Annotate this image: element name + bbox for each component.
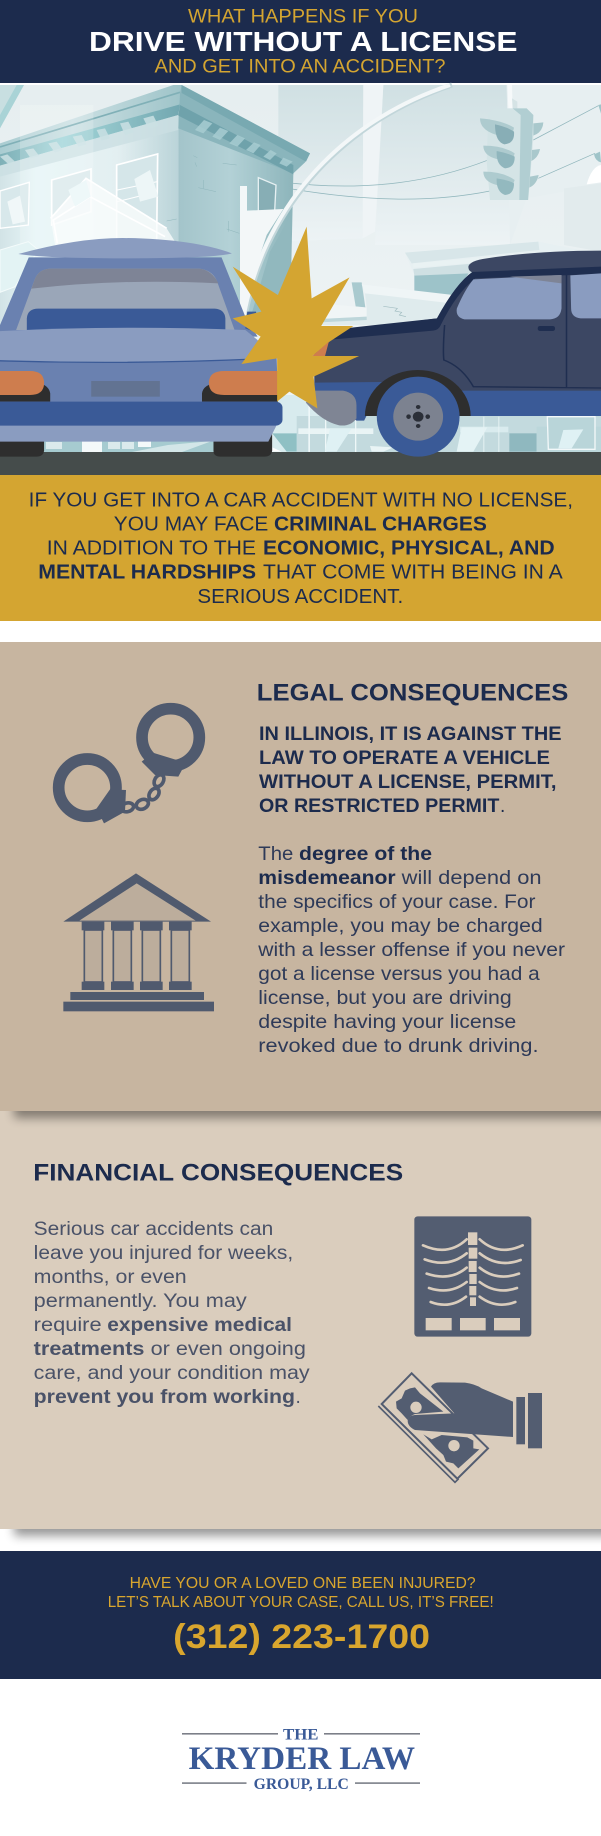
hero illustration: car collision on a city street (0, 85, 601, 475)
street under blue car (0, 440, 243, 452)
legal body text: the specifics of your case. For (258, 891, 536, 913)
header banner: WHAT HAPPENS IF YOU (188, 6, 418, 28)
logo: the kryder law group: THE (283, 1727, 318, 1744)
header banner (0, 0, 601, 83)
glass overlays (20, 105, 93, 325)
logo: the kryder law group (182, 1727, 420, 1793)
legal body text: example, you may be charged (258, 915, 543, 937)
legal body text: misdemeanor (258, 867, 396, 889)
corner building (0, 85, 310, 325)
gold intro band: ECONOMIC, PHYSICAL, AND (263, 538, 555, 560)
financial body text: expensive medical (107, 1315, 292, 1336)
financial body text: treatments (34, 1339, 145, 1360)
financial body text: Serious car accidents can (34, 1219, 273, 1240)
gold intro band: IF YOU GET INTO A CAR ACCIDENT WITH NO LICENSE, (29, 490, 573, 512)
white panel and far wall (248, 217, 291, 325)
side wall (352, 282, 365, 307)
legal heading: LEGAL CONSEQUENCES (257, 680, 568, 707)
legal body text: despite having your license (258, 1011, 516, 1033)
icon: hand holding money (378, 1373, 542, 1482)
gold intro band: SERIOUS ACCIDENT. (197, 586, 403, 608)
financial heading: FINANCIAL CONSEQUENCES (33, 1159, 403, 1186)
legal body text: with a lesser offense if you never (257, 939, 566, 961)
financial body text: prevent you from working (34, 1387, 295, 1408)
phone number: (312) 223-1700 (173, 1618, 430, 1656)
financial body text: months, or even (34, 1267, 187, 1288)
panel: legal consequences (0, 642, 601, 1118)
logo: the kryder law group: KRYDER LAW (189, 1741, 415, 1777)
impact starburst (233, 227, 359, 408)
call to action band: LET’S TALK ABOUT YOUR CASE, CALL US, IT’S FREE! (108, 1594, 494, 1611)
header banner: DRIVE WITHOUT A LICENSE (89, 26, 518, 57)
illinois law statement: OR RESTRICTED PERMIT (259, 796, 500, 817)
legal body text: got a license versus you had a (258, 963, 540, 985)
legal body text (257, 843, 566, 1057)
legal body text: license, but you are driving (258, 987, 512, 1009)
financial body text: leave you injured for weeks, (34, 1243, 293, 1264)
street light arm (243, 85, 452, 322)
header banner: AND GET INTO AN ACCIDENT? (154, 56, 446, 78)
dark car (306, 251, 601, 457)
road (0, 452, 601, 475)
illinois law statement: LAW TO OPERATE A VEHICLE (259, 748, 550, 769)
panel: financial consequences (0, 1105, 601, 1536)
illinois law statement: . (500, 796, 505, 817)
gold intro band: YOU MAY FACE (114, 514, 268, 536)
illinois law statement (259, 724, 562, 817)
logo: the kryder law group: GROUP, LLC (254, 1776, 349, 1793)
legal body text: The (258, 843, 293, 865)
blue car (0, 238, 282, 457)
gold intro band (0, 475, 601, 621)
call to action band (0, 1551, 601, 1679)
illinois law statement: IN ILLINOIS, IT IS AGAINST THE (259, 724, 562, 745)
wires (278, 106, 598, 199)
legal body text: will depend on (401, 867, 542, 889)
legal body text: revoked due to drunk driving. (258, 1035, 538, 1057)
financial body text: require (34, 1315, 102, 1336)
lower street strip (272, 395, 601, 452)
traffic light (480, 104, 601, 200)
financial body text: or even ongoing (151, 1339, 306, 1360)
gold intro band: IN ADDITION TO THE (47, 538, 256, 560)
icon: courthouse (63, 873, 214, 1011)
windows (258, 178, 276, 211)
low rooftop (405, 242, 601, 318)
call to action band: HAVE YOU OR A LOVED ONE BEEN INJURED? (130, 1575, 476, 1592)
illinois law statement: WITHOUT A LICENSE, PERMIT, (259, 772, 556, 793)
financial body text: . (296, 1387, 301, 1408)
icon: chest x-ray (414, 1216, 531, 1337)
city background and traffic signal (278, 85, 601, 325)
financial body text: care, and your condition may (34, 1363, 310, 1384)
financial body text (34, 1219, 310, 1408)
sky (0, 85, 601, 452)
financial body text: permanently. You may (34, 1291, 247, 1312)
gold intro band: THAT COME WITH BEING IN A (263, 562, 563, 584)
gold intro band: CRIMINAL CHARGES (274, 514, 487, 536)
gold intro band: MENTAL HARDSHIPS (38, 562, 256, 584)
legal body text: degree of the (299, 843, 432, 865)
icon: handcuffs (59, 709, 199, 823)
